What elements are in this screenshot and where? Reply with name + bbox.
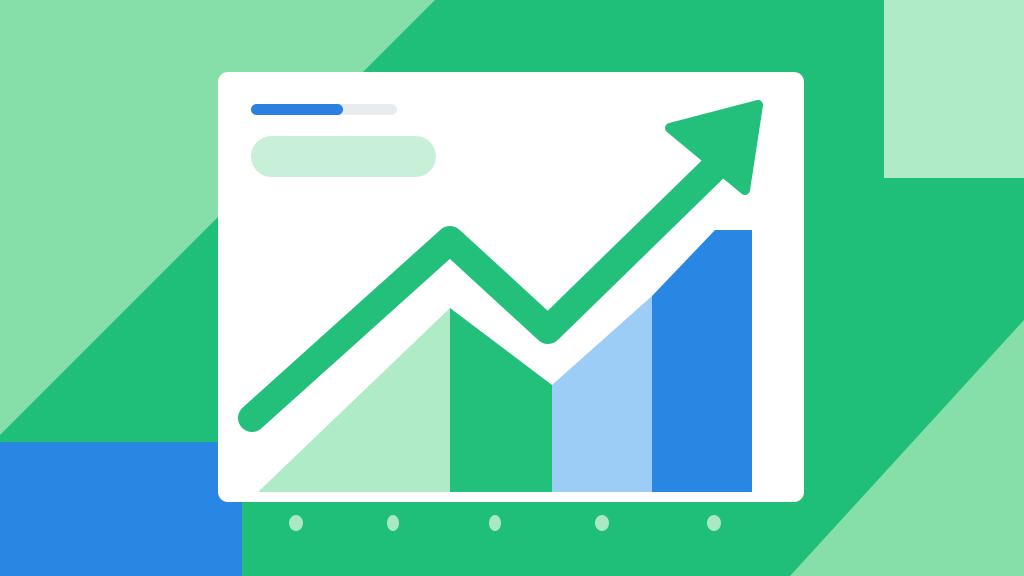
trend arrow xyxy=(252,105,758,418)
chart: area shapes xyxy=(258,230,752,492)
x-axis dots xyxy=(289,515,721,531)
panel: chart card xyxy=(218,72,804,502)
title placeholder pill xyxy=(251,136,436,177)
background: top-right light block xyxy=(884,0,1024,178)
background: bottom-left blue block xyxy=(0,442,242,576)
progress bar xyxy=(251,104,397,115)
